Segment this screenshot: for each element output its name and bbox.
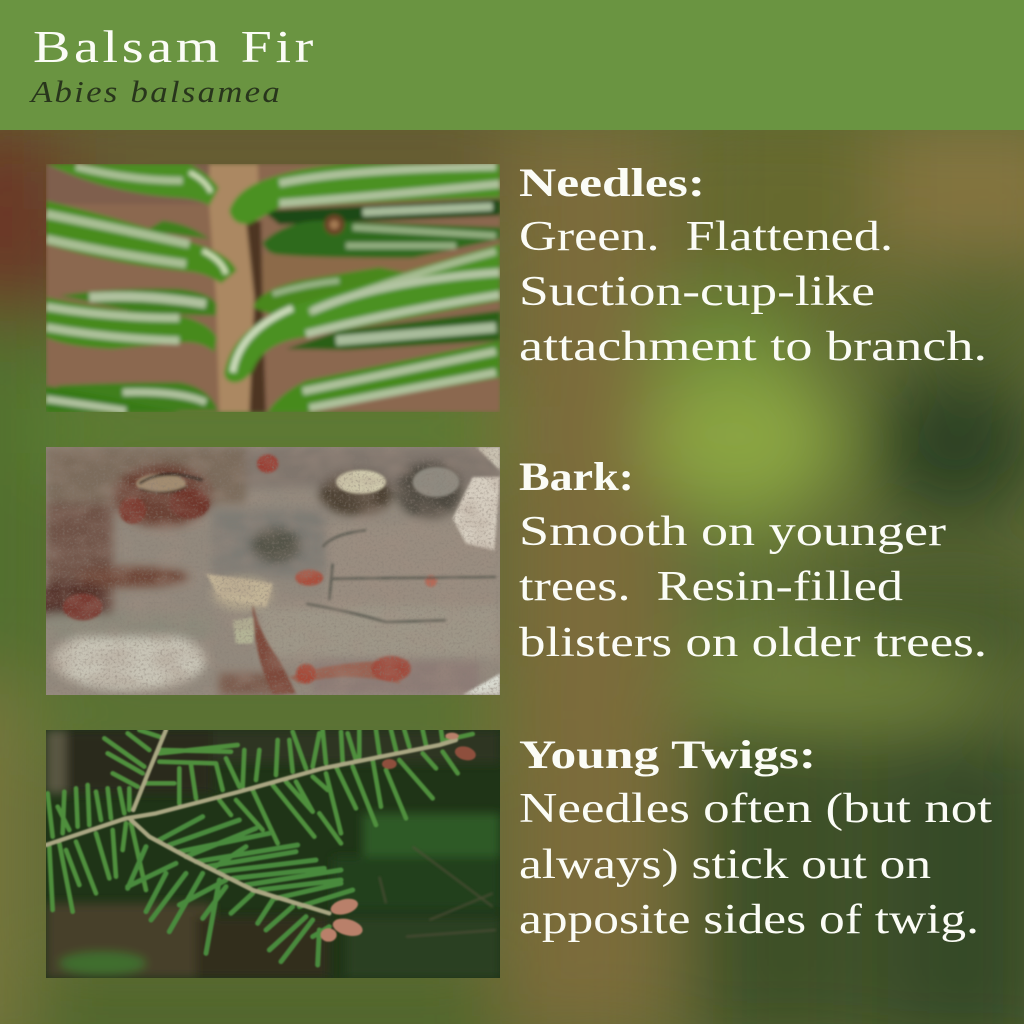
section: needles text: Suction-cup-like: [519, 269, 875, 315]
subtitle: scientific name: Abies balsamea: [29, 74, 282, 109]
section: needles text: [519, 160, 987, 370]
header band: [0, 0, 1024, 130]
section: bark text: blisters on older trees.: [519, 620, 987, 666]
section: young twigs text: Needles often (but not: [519, 786, 992, 832]
section: bark text: [519, 454, 987, 666]
section: young twigs text: Young Twigs:: [519, 732, 816, 777]
section: needles text: attachment to branch.: [519, 324, 987, 370]
section: bark text: Bark:: [519, 454, 634, 499]
section: young twigs text: apposite sides of twig.: [519, 897, 979, 943]
section: needles text: Green. Flattened.: [519, 214, 893, 260]
section: young twigs text: [519, 732, 992, 943]
photo: needles close-up: [46, 164, 500, 412]
photo: bark: [36, 447, 500, 695]
section: bark text: trees. Resin-filled: [519, 564, 903, 610]
section: young twigs text: always) stick out on: [519, 842, 931, 888]
photo: young twigs: [46, 730, 500, 978]
section: bark text: Smooth on younger: [519, 509, 946, 555]
buds: [321, 733, 477, 942]
needle clusters: [48, 730, 473, 912]
section: needles text: Needles:: [519, 160, 705, 205]
twig branches: [46, 730, 456, 913]
title: Balsam Fir: [33, 21, 317, 72]
